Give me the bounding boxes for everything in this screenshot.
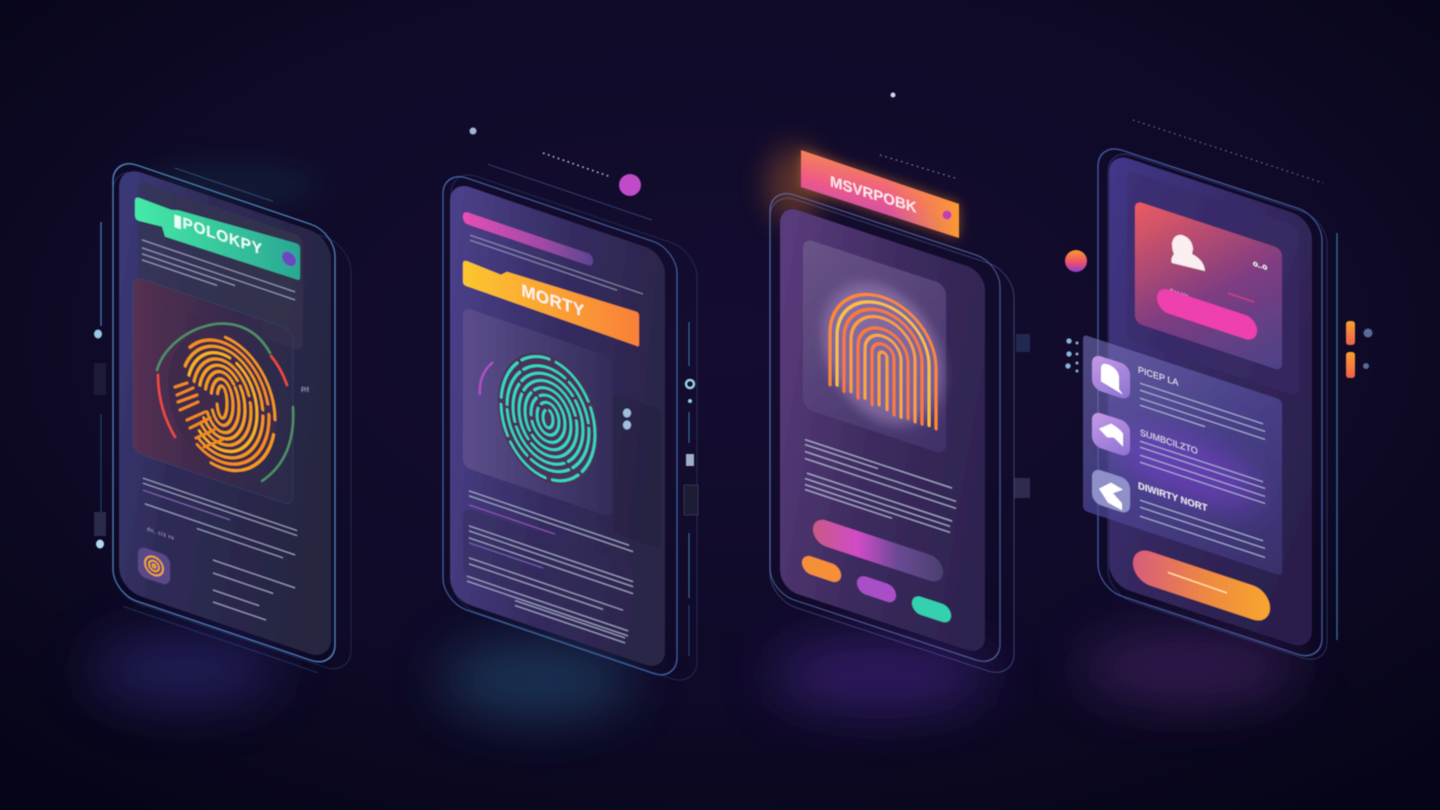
card text: Saa.Ho — [1170, 288, 1188, 300]
left badge — [1065, 250, 1087, 272]
fingerprint backing — [823, 266, 943, 442]
left side details — [94, 222, 106, 548]
pill highlight — [1168, 572, 1227, 593]
fingerprint arcs — [157, 324, 293, 481]
orange banner — [463, 253, 639, 347]
purple button — [857, 574, 896, 605]
top dots — [880, 92, 955, 178]
ambient glows — [89, 147, 1300, 718]
small caption: dn, c/z re — [147, 527, 175, 542]
row 1 heading: PICEP LA — [1138, 365, 1179, 388]
profile card — [1135, 201, 1282, 371]
top dotted line — [1133, 120, 1323, 183]
lower card — [463, 507, 633, 635]
card bar — [1228, 293, 1254, 302]
phone 4 outer frames — [1098, 142, 1327, 666]
phone 1 screen — [119, 165, 331, 661]
banner title: MORTY — [521, 280, 585, 321]
phone 3 screen — [780, 204, 985, 656]
tile 3 — [1092, 467, 1130, 515]
right side micro label: P⁄ℓ — [301, 387, 310, 394]
lower text lines — [143, 478, 297, 631]
tile 1 — [1092, 353, 1130, 401]
gradient pill — [813, 516, 943, 585]
top text lines — [470, 235, 643, 299]
tile 2 — [1092, 410, 1130, 458]
fingerprint panel — [803, 238, 946, 455]
banner dot — [942, 210, 952, 220]
top dotted line — [543, 153, 611, 177]
banner glow — [801, 150, 959, 238]
phone 1 — [94, 147, 351, 684]
glass panel — [1083, 334, 1282, 576]
phone 3 outer frames — [770, 187, 1014, 680]
text lines — [805, 440, 956, 539]
row 2 lines — [1140, 441, 1265, 503]
teal button — [912, 594, 951, 625]
glass glow — [1120, 417, 1260, 523]
phone 1 upper card — [138, 180, 303, 352]
banner title: ▮POLOKPY — [173, 212, 263, 259]
left top dot — [470, 128, 476, 134]
phone 1 outer frames — [113, 147, 351, 684]
fingerprint panel — [133, 276, 293, 506]
magenta arc — [480, 362, 493, 395]
orange bars — [1346, 321, 1355, 378]
side dots — [1363, 328, 1372, 369]
person icon — [1171, 235, 1205, 271]
lower text lines — [467, 490, 633, 646]
row 3 heading: DIWIRTY NORT — [1138, 481, 1207, 514]
orange pill — [1133, 546, 1270, 625]
pink bar — [463, 211, 593, 267]
row 3 lines — [1140, 500, 1265, 557]
orange button — [802, 554, 841, 584]
status glyphs: o..o — [1253, 259, 1267, 272]
left ridge strokes — [175, 383, 222, 447]
green banner — [135, 188, 300, 283]
phone 4 screen — [1109, 152, 1312, 651]
app icon glyph — [145, 554, 163, 578]
phone 2 — [443, 128, 698, 688]
fingerprint teal — [498, 338, 598, 500]
fingerprint arches — [830, 280, 936, 429]
phone 4 — [1065, 120, 1372, 666]
right dark column — [613, 393, 661, 549]
phone 2 outer frames — [443, 149, 697, 688]
left dots — [1065, 338, 1078, 372]
top text lines — [142, 240, 295, 312]
banner — [801, 150, 959, 238]
right side details — [684, 322, 698, 656]
inner card — [1127, 170, 1299, 397]
fingerprint panel — [463, 307, 613, 518]
row 2 heading: SUMBCILZTO — [1140, 427, 1198, 456]
dots — [623, 408, 631, 430]
pink badge — [619, 174, 641, 196]
banner title: MSVRPOBK — [830, 173, 917, 217]
banner badge — [282, 249, 296, 268]
app icon tile — [138, 546, 170, 586]
phone 2 screen — [450, 180, 665, 671]
right line — [1336, 233, 1338, 640]
row 1 lines — [1140, 383, 1265, 446]
fingerprint orange — [168, 316, 276, 488]
phone 3 — [770, 92, 1030, 680]
hot pink pill — [1157, 286, 1257, 343]
side labels — [1014, 334, 1030, 498]
